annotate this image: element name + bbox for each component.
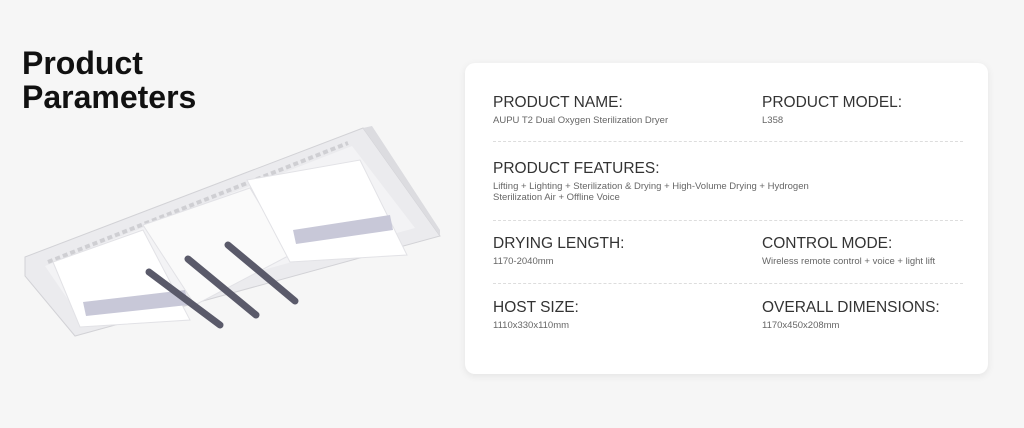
- control mode: Wireless remote control + voice + light lift: [762, 256, 935, 267]
- product model: PRODUCT MODEL:: [762, 94, 902, 111]
- strips: [83, 290, 188, 316]
- product name: [493, 94, 668, 126]
- panels: [53, 230, 190, 327]
- title: [22, 45, 196, 115]
- product model: [762, 94, 902, 126]
- host size: 1110x330x110mm: [493, 320, 569, 331]
- product features: Lifting + Lighting + Sterilization & Drying + High-Volume Drying + Hydrogen: [493, 181, 809, 192]
- bars: [149, 245, 295, 325]
- host size: [493, 299, 579, 331]
- product name: AUPU T2 Dual Oxygen Sterilization Dryer: [493, 115, 668, 126]
- control mode: CONTROL MODE:: [762, 235, 892, 252]
- product name: PRODUCT NAME:: [493, 94, 623, 111]
- frame: [25, 128, 440, 336]
- panel: parameters card: [465, 63, 988, 374]
- drying length: 1170-2040mm: [493, 256, 554, 267]
- product features: Sterilization Air + Offline Voice: [493, 192, 620, 203]
- overall dimensions: 1170x450x208mm: [762, 320, 839, 331]
- drying length: [493, 235, 624, 267]
- end face: [363, 126, 440, 236]
- control mode: [762, 235, 936, 267]
- product model: L358: [762, 115, 783, 126]
- host size: HOST SIZE:: [493, 299, 579, 316]
- overall dimensions: OVERALL DIMENSIONS:: [762, 299, 940, 316]
- overall dimensions: [762, 299, 940, 331]
- product features: PRODUCT FEATURES:: [493, 160, 660, 177]
- product illustration: [24, 126, 441, 336]
- title: Parameters: [22, 79, 196, 115]
- drying length: DRYING LENGTH:: [493, 235, 624, 252]
- title: Product: [22, 45, 143, 81]
- product features: [493, 160, 809, 203]
